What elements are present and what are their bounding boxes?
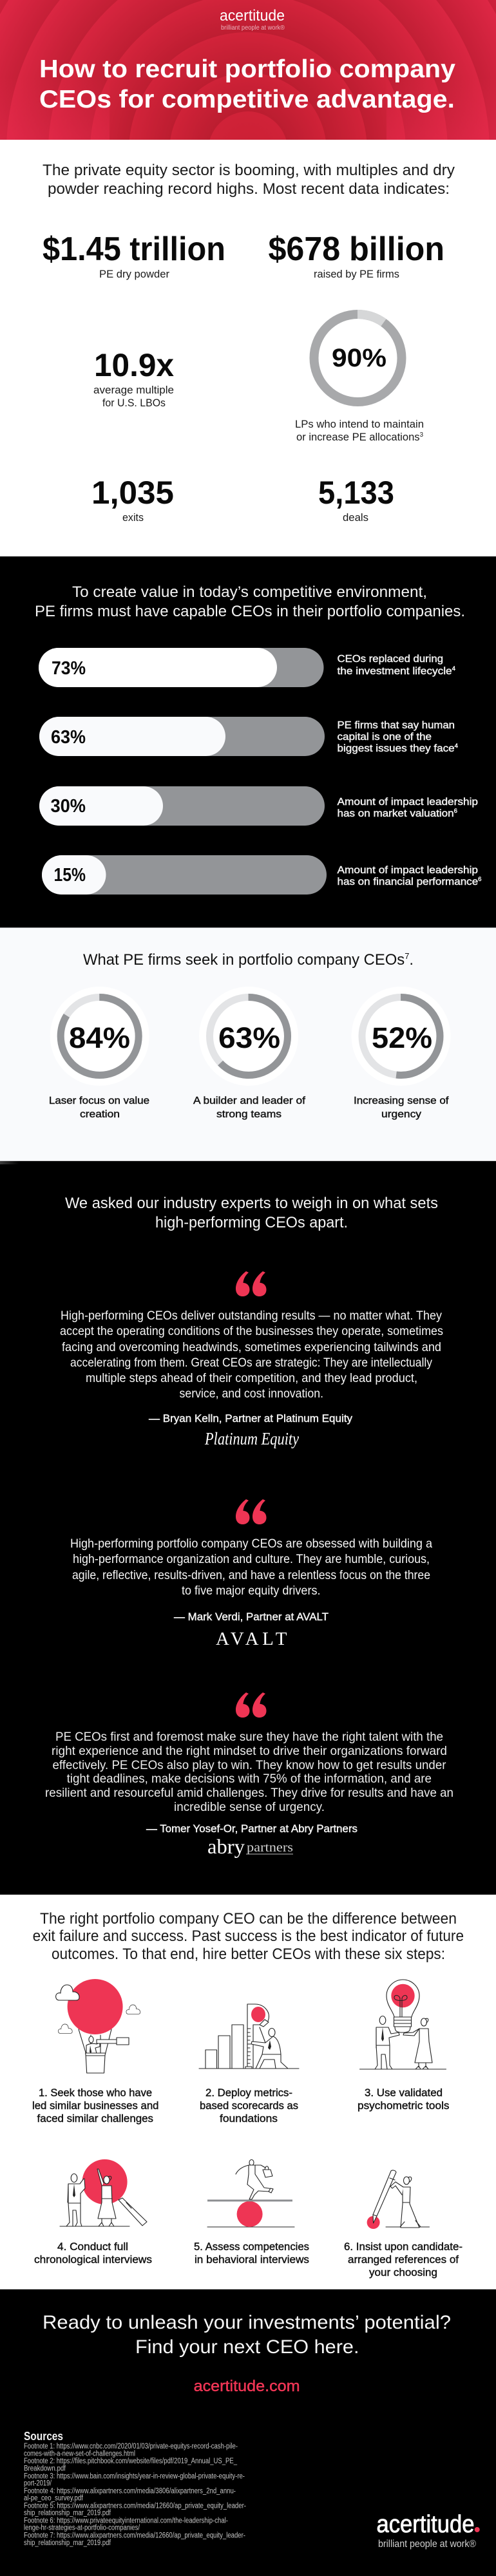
stat: exits: exits [122, 511, 144, 524]
step 6 [344, 2170, 463, 2278]
intro text [43, 162, 455, 198]
logo: acertitude footer [376, 2511, 480, 2550]
donut: 52%: urgency [381, 1109, 421, 1120]
call to action: Ready to unleash your investments’ potential? [43, 2312, 451, 2333]
bar: 63%: 63% [51, 727, 86, 748]
attribution: — Tomer Yosef-Or, Partner at Abry Partners [146, 1823, 358, 1835]
sources: Footnote 7: https://www.alixpartners.com/media/12660/ap_private_equity_leader- [24, 2532, 245, 2539]
stat: raised by PE firms: raised by PE firms [314, 268, 399, 280]
logo: acertitude footer: brilliant people at work® [378, 2539, 476, 2550]
label: in behavioral interviews [195, 2253, 309, 2266]
donut: 52%: Increasing sense of [354, 1095, 449, 1106]
panel: six steps [0, 1895, 496, 2289]
step 2 [199, 2004, 299, 2125]
call to action: Find your next CEO here. [135, 2336, 359, 2358]
quote text: High-performing CEOs deliver outstanding results — no matter what. They [61, 1309, 442, 1323]
bar: 73%: the investment lifecycle [338, 666, 444, 677]
donut: 90% of LPs: LPs who intend to maintain [295, 418, 424, 430]
stat: average multiple: average multiple [93, 384, 174, 396]
label [194, 2240, 309, 2266]
sources: Footnote 6: https://www.privateequityinternational.com/the-leadership-chal- [24, 2517, 228, 2524]
quote text: high-performance organization and culture. They are humble, curious, [73, 1552, 430, 1566]
sources: Footnote 1: https://www.cnbc.com/2020/01/03/private-equitys-record-cash-pile- [24, 2443, 238, 2450]
quote text: right experience and the right mindset to drive their organizations forward [52, 1744, 447, 1758]
quote text: accept the operating conditions of the businesses they operate, sometimes [60, 1324, 443, 1338]
bar: 63%: PE firms that say human [338, 720, 455, 731]
donut: 84%: Laser focus on value [49, 1095, 149, 1106]
label: foundations [220, 2112, 278, 2125]
bar: 30%: has on market valuation [338, 808, 446, 819]
logo: acertitude [220, 7, 285, 32]
attribution: — Bryan Kelln, Partner at Platinum Equity [149, 1412, 352, 1425]
logo: AVALT: AVALT [216, 1629, 287, 1649]
bar: 73%: 4 [452, 665, 455, 672]
bar: 15%: has on financial performance [338, 876, 470, 887]
logo: Platinum Equity: Platinum Equity [204, 1429, 299, 1448]
sources: ship_relationship_mar_2019.pdf [24, 2510, 111, 2517]
bar: 30%: Amount of impact leadership [338, 797, 478, 808]
donut: 90% of LPs: 90% [332, 344, 386, 372]
donut: 63%: A builder and leader of [193, 1095, 306, 1106]
sources: ship_relationship_mar_2019.pdf [24, 2539, 111, 2547]
sources: Sources [24, 2430, 63, 2443]
label [358, 2087, 450, 2112]
bar: 30%: 30% [50, 796, 86, 817]
logo: acertitude: brilliant people at work® [221, 24, 285, 32]
bar: 73%: CEOs replaced during [338, 654, 443, 665]
panel: what PE firms seek [0, 927, 496, 1161]
heading [65, 1195, 438, 1231]
quote text: agile, reflective, results-driven, and have a relentless focus on the three [72, 1568, 430, 1582]
sources: port-2019/ [24, 2479, 52, 2487]
donut: 90% of LPs: or increase PE allocations [296, 431, 423, 443]
icon: magnifying glass with two people [60, 2159, 147, 2226]
label: 6. Insist upon candidate- [344, 2240, 463, 2253]
heading: We asked our industry experts to weigh in on what sets [65, 1195, 438, 1212]
label: your choosing [369, 2266, 437, 2278]
donut: 63%: 63% [218, 1021, 280, 1054]
heading: The right portfolio company CEO can be the difference between [40, 1910, 457, 1927]
heading: outcomes. To that end, hire better CEOs with these six steps: [52, 1946, 445, 1963]
label: 3. Use validated [365, 2087, 443, 2099]
step 4 [34, 2159, 152, 2266]
attribution: — Mark Verdi, Partner at AVALT [174, 1611, 329, 1623]
stat: average multiple: 10.9x [94, 347, 174, 383]
step 5 [194, 2160, 309, 2266]
logo: abry partners [207, 1835, 293, 1858]
title: How to recruit portfolio company [39, 55, 455, 83]
heading: What PE firms seek in portfolio company CEOs [83, 951, 407, 969]
icon: quotation mark [236, 1271, 267, 1296]
sources: lenge-hr-strategies-at-portfolio-companies/ [24, 2524, 140, 2532]
sources: Footnote 3: https://www.bain.com/insights/year-in-review-global-private-equity-re- [24, 2472, 245, 2480]
stat: exits: 1,035 [91, 475, 174, 511]
logo: acertitude footer: acertitude [376, 2511, 474, 2538]
call to action [43, 2312, 451, 2358]
quote text: tight deadlines, make decisions with 75% of the information, and are [67, 1772, 432, 1786]
bar: 15%: Amount of impact leadership [338, 865, 478, 876]
website link: acertitude.com [194, 2378, 300, 2395]
icon: bar chart with ruler and kneeling person [199, 2004, 299, 2069]
label: 1. Seek those who have [39, 2087, 152, 2099]
heading: PE firms must have capable CEOs in their portfolio companies. [35, 603, 465, 620]
label [200, 2087, 298, 2125]
stat: average multiple: for U.S. LBOs [102, 397, 166, 409]
label: led similar businesses and [32, 2099, 158, 2112]
panel: red header [0, 0, 496, 140]
label: chronological interviews [34, 2253, 152, 2266]
heading: . [409, 951, 414, 969]
step 1 [32, 1979, 158, 2125]
concentric ring background [0, 0, 496, 140]
label: based scorecards as [200, 2099, 298, 2112]
title: CEOs for competitive advantage. [39, 86, 455, 113]
label [34, 2240, 152, 2266]
stat: average multiple [93, 347, 174, 409]
quote text [70, 1537, 432, 1598]
bar: 73% [39, 648, 455, 687]
intro text: powder reaching record highs. Most recent data indicates: [48, 180, 450, 198]
icon: person balancing on plank and ball [207, 2160, 294, 2227]
logo: abry partners: partners [247, 1841, 293, 1855]
heading [35, 583, 465, 620]
icon: quotation mark [236, 1499, 267, 1524]
quote text: PE CEOs first and foremost make sure they have the right talent with the [55, 1730, 443, 1744]
bar: 63% [39, 717, 458, 756]
donut: 90% of LPs: 3 [420, 431, 423, 439]
bar: 73%: 73% [52, 658, 86, 679]
quote: Tomer Yosef-Or [45, 1692, 453, 1858]
bar: 30%: 6 [454, 808, 457, 814]
bar: 15%: 6 [478, 876, 482, 882]
intro text: The private equity sector is booming, with multiples and dry [43, 162, 455, 179]
sources [24, 2430, 246, 2547]
quote text: to five major equity drivers. [182, 1584, 321, 1598]
stat: deals: 5,133 [318, 475, 394, 511]
logo: abry partners: abry [207, 1835, 245, 1858]
quote text: accelerating from them. Great CEOs are strategic: They are intellectually [70, 1356, 432, 1370]
label: faced similar challenges [37, 2112, 153, 2125]
quote: Bryan Kelln [60, 1271, 443, 1448]
label: 4. Conduct full [57, 2240, 128, 2253]
quote text [45, 1730, 453, 1814]
heading: exit failure and success. Past success is the best indicator of future [33, 1927, 464, 1945]
icon: light bulb held by two people [359, 1980, 446, 2069]
bar: 15% [42, 855, 482, 895]
quote text [60, 1309, 443, 1401]
heading: high-performing CEOs apart. [155, 1214, 348, 1231]
sources: Breakdown.pdf [24, 2465, 66, 2473]
quote: Mark Verdi [70, 1499, 432, 1649]
heading: To create value in today’s competitive environment, [72, 583, 427, 601]
icon: hot air balloon with telescope [56, 1979, 140, 2073]
bar: 63%: biggest issues they face [338, 743, 447, 754]
bar: 63%: capital is one of the [338, 732, 432, 743]
panel: footer call to action and sources [0, 2289, 496, 2576]
donut: 52%: 52% [372, 1021, 432, 1054]
sources: Footnote 2: https://files.pitchbook.com/website/files/pdf/2019_Annual_US_PE_ [24, 2458, 237, 2465]
label: 2. Deploy metrics- [205, 2087, 292, 2099]
donut: 63% [193, 987, 306, 1120]
label: 5. Assess competencies [194, 2240, 309, 2253]
quote text: service, and cost innovation. [179, 1387, 323, 1401]
panel: value creation bars [0, 556, 496, 927]
sources: al-pe_ceo_survey.pdf [24, 2495, 84, 2503]
sources: comes-with-a-new-set-of-challenges.html [24, 2450, 135, 2458]
quote text: facing and overcoming headwinds, sometimes experiencing tailwinds and [62, 1340, 441, 1354]
bar: 63%: 4 [455, 743, 458, 749]
bar: 15%: 15% [54, 865, 86, 886]
label: psychometric tools [358, 2099, 450, 2112]
sources: Footnote 4: https://www.alixpartners.com/media/3806/alixpartners_2nd_annu- [24, 2487, 236, 2495]
label [32, 2087, 158, 2125]
label: arranged references of [348, 2253, 459, 2266]
panel: market statistics [0, 140, 496, 556]
stat: PE dry powder: $1.45 trillion [43, 231, 225, 268]
title [39, 55, 455, 113]
quote text: resilient and resourceful amid challenges. They drive for results and have an [45, 1786, 453, 1800]
bar: 30% [39, 786, 478, 826]
donut: 63%: strong teams [216, 1109, 281, 1120]
icon: quotation mark [236, 1692, 267, 1718]
donut: 84% [49, 987, 149, 1120]
heading [33, 1910, 464, 1963]
quote text: effectively. PE CEOs also play to win. They know how to get results under [53, 1758, 446, 1772]
logo: acertitude: acertitude [220, 7, 285, 24]
quote text: High-performing portfolio company CEOs are obsessed with building a [70, 1537, 432, 1551]
stat: raised by PE firms: $678 billion [268, 231, 444, 268]
donut: 90% of LPs [295, 314, 424, 443]
donut: 52% [352, 987, 451, 1120]
step 3 [358, 1980, 450, 2112]
stat: deals: deals [343, 511, 368, 524]
donut: 84%: 84% [69, 1021, 130, 1054]
sources: Footnote 5: https://www.alixpartners.com/media/12660/ap_private_equity_leader- [24, 2502, 246, 2510]
donut: 84%: creation [80, 1109, 120, 1120]
quote text: incredible sense of urgency. [174, 1800, 325, 1814]
panel: expert quotes [0, 1161, 496, 1895]
icon: person drawing with giant pencil [367, 2170, 429, 2229]
stat: PE dry powder: PE dry powder [99, 268, 169, 280]
heading: 7 [405, 951, 409, 961]
quote text: multiple steps ahead of their competition, and they lead product, [86, 1371, 417, 1385]
label [344, 2240, 463, 2278]
